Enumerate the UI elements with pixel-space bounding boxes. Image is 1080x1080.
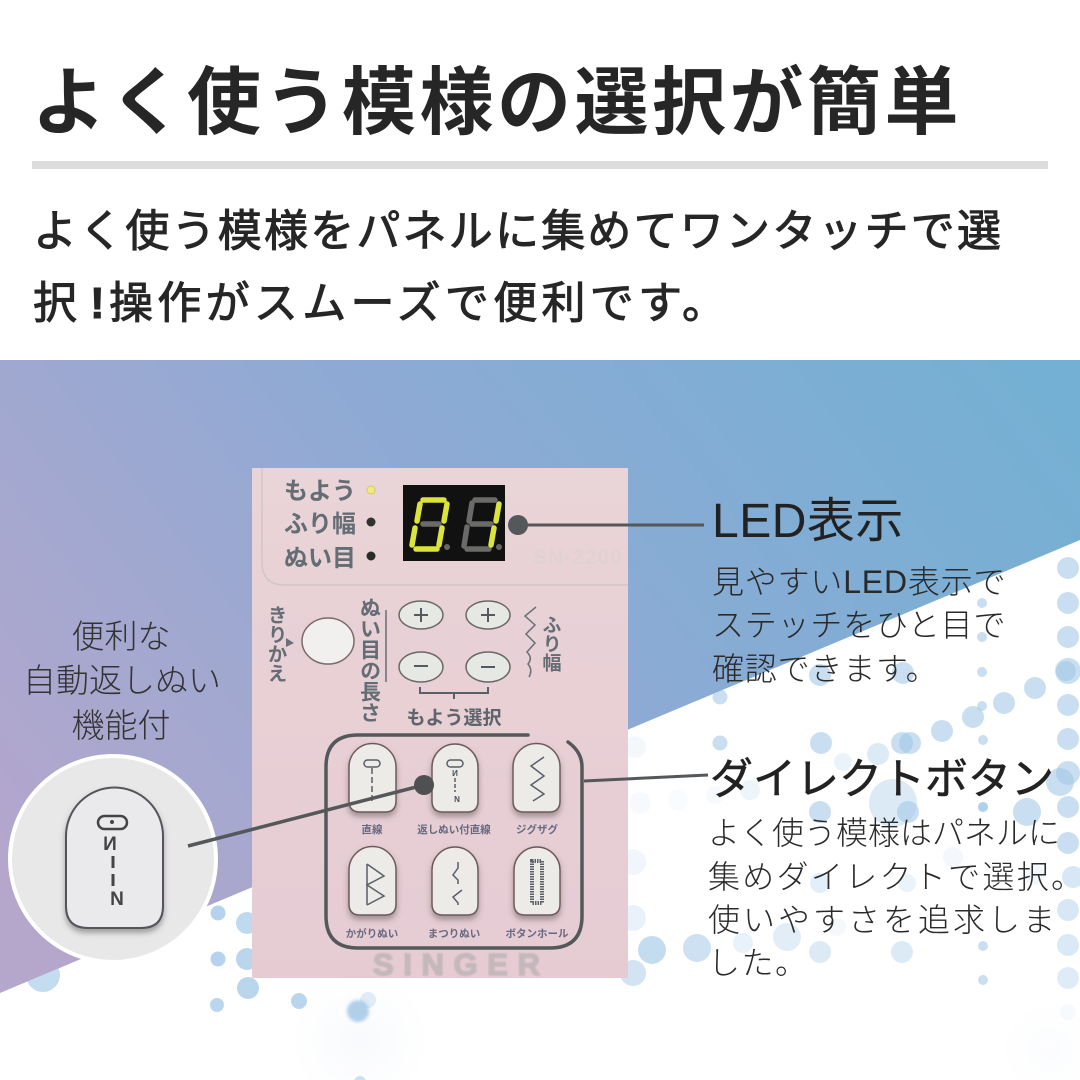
bracket (420, 687, 488, 699)
zigzag icon (525, 607, 536, 677)
indicator labels: ふり幅 (284, 511, 356, 538)
pattern select label: もよう選択 (406, 707, 502, 729)
stitch names: まつりぬい (428, 928, 480, 940)
magnified button circle (10, 756, 216, 962)
brand logo: SINGER (373, 947, 540, 982)
intro text: 択 (33, 279, 81, 328)
leader line: LED display (508, 515, 704, 535)
indicator labels: ぬい目 (284, 545, 356, 572)
heading: LED display: LED表示 (712, 495, 904, 548)
vertical label: width: ふり幅 (540, 615, 561, 672)
model number: SN-2200 (533, 546, 623, 569)
stitch names: 直線 (362, 823, 383, 836)
leader line: magnified button (188, 775, 434, 846)
stitch names: 返しぬい付直線 (417, 823, 491, 836)
text: LED display description: ステッチをひと目で (712, 607, 1006, 643)
reverse stitch letters: N (454, 795, 460, 804)
stitch names (346, 823, 569, 940)
dot pattern (26, 557, 1080, 1080)
indicator labels: もよう (284, 478, 356, 505)
text: direct buttons description: よく使う模様はパネルに (708, 815, 1060, 851)
stitch names: かがりぬい (346, 927, 398, 940)
direct button frame (326, 735, 582, 948)
title: よく使う模様の選択が簡単 (32, 61, 962, 144)
reverse stitch letters (452, 769, 460, 804)
indicator labels (284, 478, 356, 572)
heading: direct buttons: ダイレクトボタン (710, 756, 1054, 804)
text: direct buttons description: 集めダイレクトで選択。 (708, 859, 1080, 895)
stitch names: ボタンホール (506, 928, 569, 940)
stitch buttons (349, 744, 560, 915)
text: direct buttons description: 使いやすさを追求しま (708, 902, 1058, 938)
magnified button circle: N (110, 889, 124, 910)
text: LED display description (712, 564, 1006, 687)
reverse stitch letters: И (452, 769, 458, 778)
text: LED display description: 確認できます。 (712, 651, 938, 687)
LED display (403, 485, 505, 561)
callout: automatic reverse stitch text: 便利な (72, 618, 170, 655)
text: direct buttons description (708, 815, 1080, 981)
callout: automatic reverse stitch text (23, 618, 221, 744)
stitch names: ジグザグ (516, 823, 558, 836)
callout: automatic reverse stitch text: 自動返しぬい (23, 662, 221, 699)
panel: sewing machine control panel (252, 468, 628, 982)
text: LED display description: 見やすいLED表示で (712, 564, 1006, 600)
plus minus buttons (399, 601, 510, 682)
callout: automatic reverse stitch text: 機能付 (72, 707, 170, 744)
vertical label: stitch length: ぬい目の長さ (358, 597, 381, 723)
stitch symbols (364, 757, 544, 905)
intro text: 操作がスムーズで便利です。 (109, 279, 730, 328)
gradient background (0, 360, 1080, 1080)
magnified button circle: И (103, 834, 117, 855)
vertical label: kirikae: きりかえ (264, 605, 286, 683)
text: direct buttons description: した。 (708, 945, 809, 981)
intro text: ! (90, 279, 109, 328)
intro text: よく使う模様をパネルに集めてワンタッチで選 (33, 207, 1003, 256)
select button (286, 618, 354, 664)
intro text (33, 207, 1003, 328)
leader line: direct buttons (584, 775, 708, 781)
indicator lamps (366, 486, 376, 560)
